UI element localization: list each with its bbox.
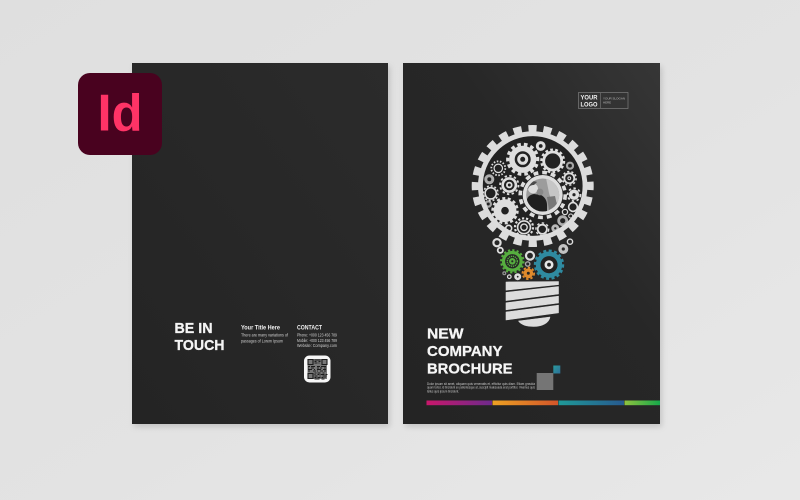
decorative squares: [537, 366, 560, 390]
text block: your title here: passages of Lorem Ipsum: [241, 338, 283, 344]
icon: indesign app badge: [78, 73, 162, 155]
logo box: YOUR: [580, 96, 598, 102]
text block: your title here: [241, 326, 289, 344]
logo box: YOUR SLOGAN: [603, 96, 625, 100]
logo box: HERE: [603, 100, 611, 104]
gear: teal blue: [535, 251, 563, 279]
text block: contact: Mobile: +000 123 456 789: [297, 338, 337, 343]
text block: contact: [297, 326, 337, 348]
logo box: LOGO: [580, 103, 598, 109]
heading: new company brochure: COMPANY: [427, 343, 502, 360]
heading: new company brochure: [427, 325, 512, 378]
photo: two people: [527, 179, 559, 212]
text block: intro paragraph: quam tortor, id tincidunt ex pellentesque at, suscipit malesuada erat porttitor. Vivamus quis: [427, 386, 535, 390]
panel: front cover sheet: [403, 63, 662, 427]
logo box: [578, 92, 628, 109]
bulb screw base: [506, 282, 558, 326]
text block: your title here: Your Title Here: [241, 326, 281, 332]
heading: new company brochure: NEW: [427, 325, 464, 342]
gear: green: [501, 250, 524, 272]
heading: be in touch: [174, 321, 224, 354]
icon: qr code: [304, 356, 330, 382]
text block: contact: Phone: +000 123 456 789: [297, 332, 337, 338]
text block: contact: CONTACT: [297, 326, 322, 332]
gears under the big gear: [493, 239, 573, 279]
heading: be in touch: BE IN: [174, 321, 212, 337]
text block: intro paragraph: [427, 382, 535, 393]
heading: new company brochure: BROCHURE: [427, 360, 512, 378]
central photo gear: [520, 172, 565, 218]
icon: indesign app badge: Id: [98, 85, 142, 143]
panel: back cover sheet: [132, 63, 390, 427]
heading: be in touch: TOUCH: [174, 338, 224, 354]
large outer gear: [476, 129, 590, 243]
illustration: gear light bulb: [476, 129, 590, 326]
text block: your title here: There are many variations of: [241, 332, 289, 338]
text block: contact: Website: Company.com: [297, 343, 337, 348]
colour bar: [426, 400, 660, 405]
text block: intro paragraph: tellus quis ipsum tincidunt.: [427, 389, 459, 393]
small gears inside bulb: [483, 143, 580, 236]
gear: orange: [522, 268, 534, 279]
text block: intro paragraph: Dolor ipsum sit amet, aliquam quis venenatis et, efficitur quis diam. Etiam gravida: [427, 382, 535, 386]
